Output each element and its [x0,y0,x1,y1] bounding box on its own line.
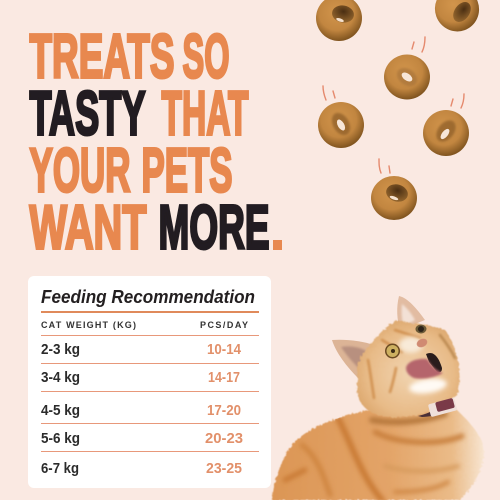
row values [205,341,243,477]
headline [30,22,282,262]
headline word: WANT: WANT [30,192,146,262]
row values: 10-14 [207,341,242,358]
headline word: THAT: THAT [162,78,248,148]
table title: Feeding Recommendation [41,286,255,307]
headline line 1: TREATS [30,22,174,92]
headline word: TASTY: TASTY [30,78,146,148]
headline line 3: YOUR [30,136,130,206]
row labels: 6-7 kg [41,460,79,477]
treat 2 [429,0,485,38]
table header: pcs per day: PCS/DAY [200,320,248,330]
treats group [316,0,485,220]
cat collar [418,398,457,417]
cat head [357,320,460,417]
cat illustration [272,296,484,500]
row rules [41,335,259,452]
treat 6 [371,159,417,220]
cat near ear [332,340,374,385]
headline line 3: PETS [142,136,232,206]
treat 4 [318,86,364,148]
row values: 17-20 [207,402,241,419]
feeding table card [28,276,271,488]
cat far ear [397,296,425,330]
row labels: 4-5 kg [41,402,80,419]
treat 1 [316,0,362,41]
cat mouth [426,353,442,372]
cat tongue [406,359,443,379]
row values: 20-23 [205,430,243,447]
row labels [41,341,80,477]
cat muzzle [408,376,448,396]
title rule [41,311,259,313]
table header: cat weight: CAT WEIGHT (KG) [41,320,136,330]
treat 5 [423,94,469,156]
row labels: 2-3 kg [41,341,80,358]
cat body [272,408,484,500]
cat left eye [385,344,400,358]
row labels: 3-4 kg [41,369,80,386]
headline period [273,240,282,250]
row values: 14-17 [208,369,240,386]
headline word: MORE: MORE [158,192,270,262]
treat 3 [384,37,430,100]
row values: 23-25 [206,460,242,477]
cat nose [415,337,429,349]
cat right eye [416,324,426,334]
headline line 1: SO [182,22,230,92]
row labels: 5-6 kg [41,430,80,447]
